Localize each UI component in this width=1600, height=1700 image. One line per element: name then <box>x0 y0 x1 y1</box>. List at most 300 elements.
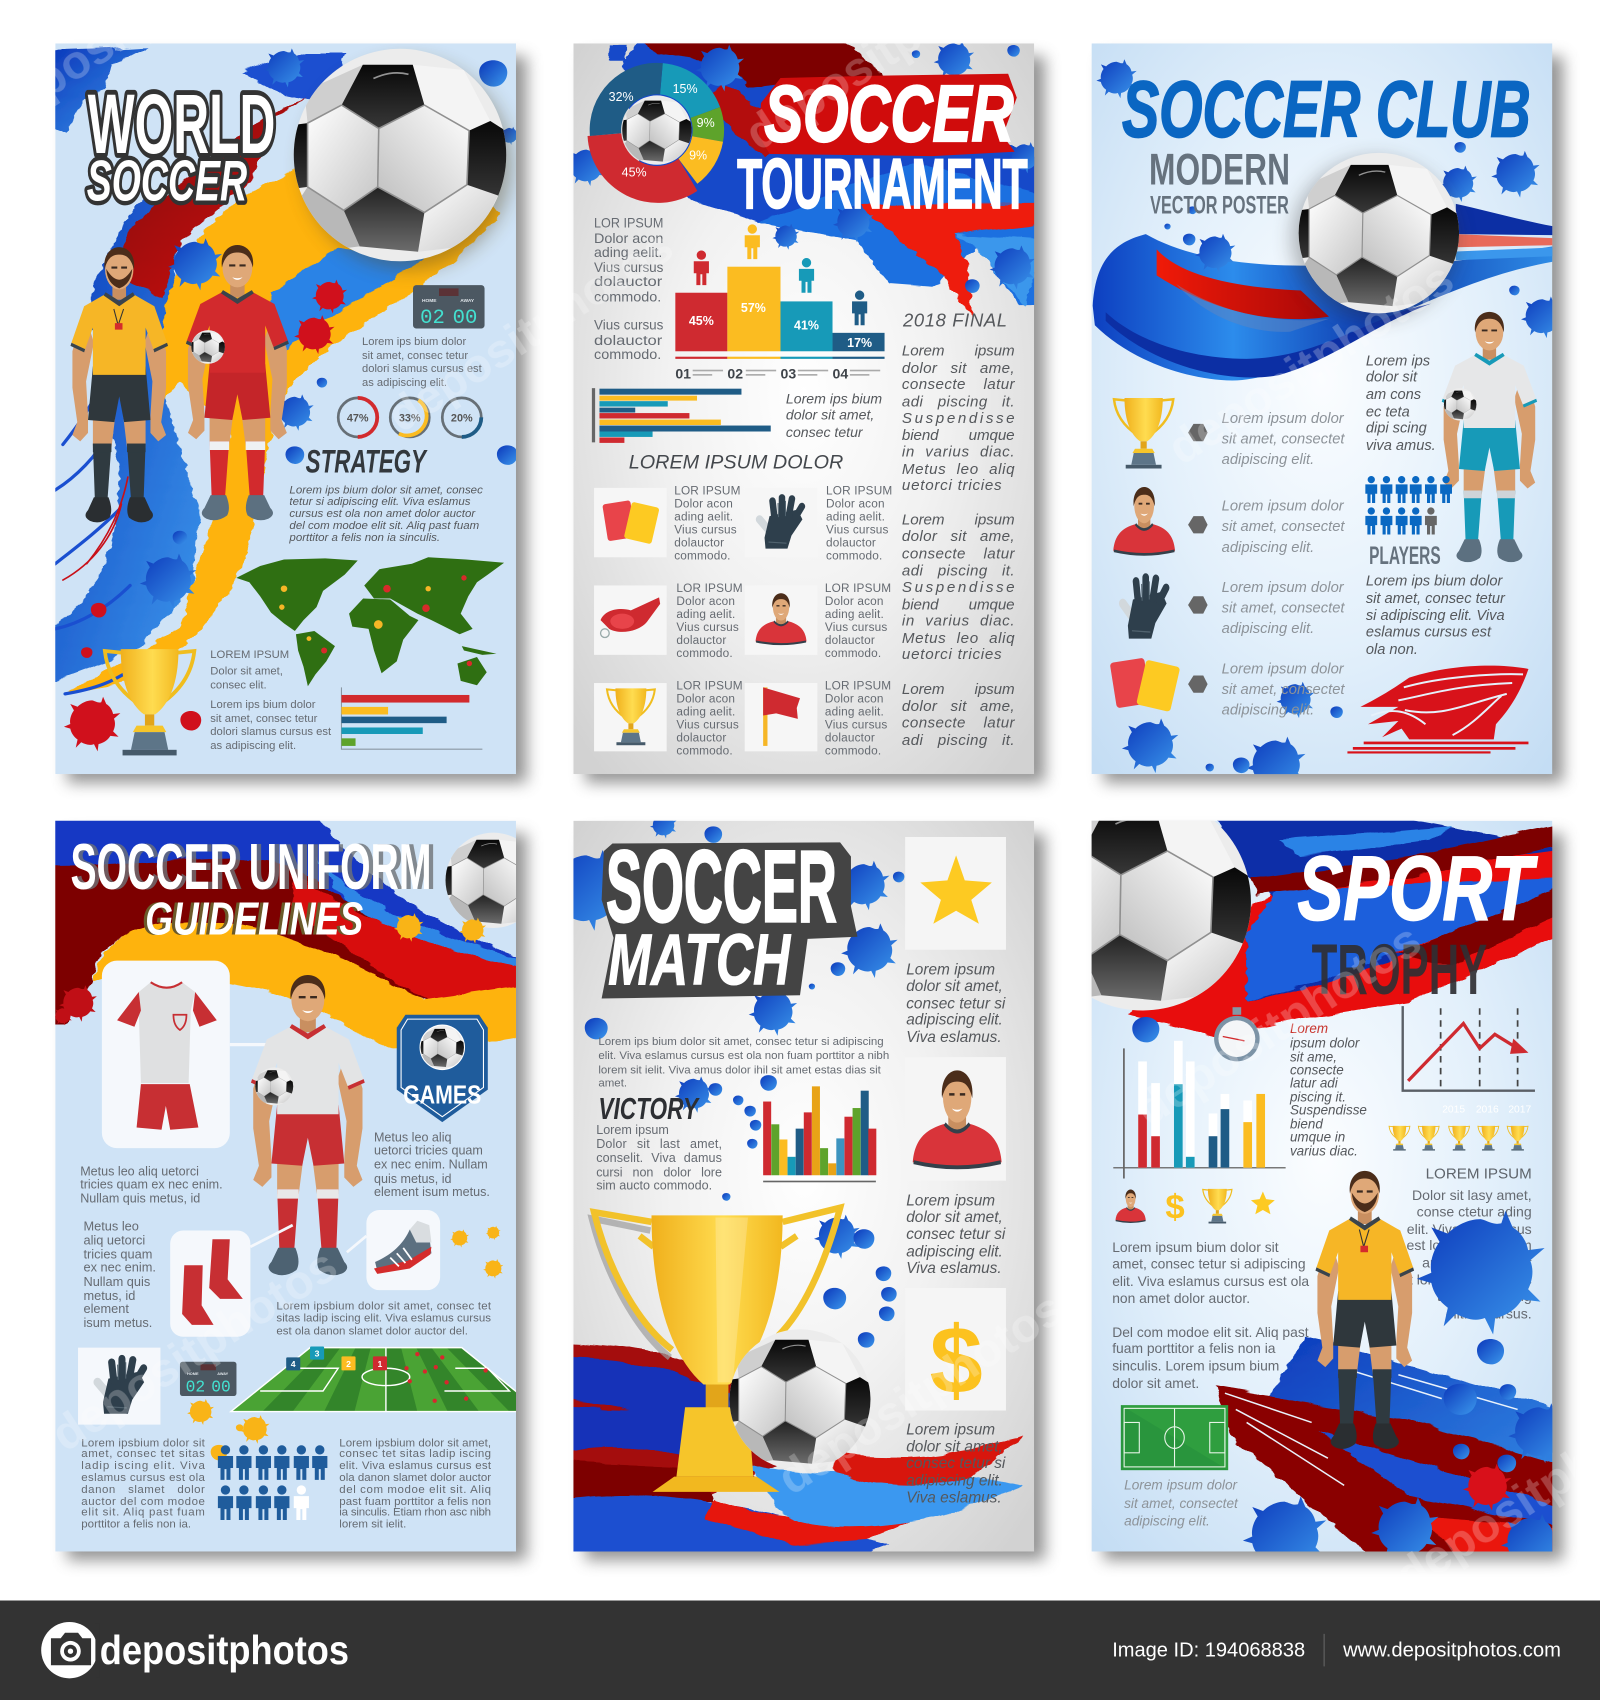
soccer ball <box>1291 153 1462 319</box>
podium chart: 02 <box>727 365 743 381</box>
text block: strategy: del com modoe elit sit. Aliq past fuam <box>289 520 480 532</box>
title <box>70 830 436 945</box>
text blocks: tile captions: commodo. <box>826 548 882 562</box>
text block: right column: Metus leo aliq <box>902 461 1015 478</box>
red player with ball <box>186 245 289 520</box>
text blocks: tile captions: Vius cursus <box>674 522 737 536</box>
podium chart <box>675 224 885 381</box>
icon tiles <box>594 488 817 751</box>
trophy row <box>1389 1126 1528 1151</box>
text blocks: tile captions: Lorem ipsum <box>906 962 995 979</box>
ink blots <box>1096 59 1564 794</box>
text blocks: tile captions: commodo. <box>674 548 731 562</box>
text block: lor ipsum: commodo. <box>594 347 661 362</box>
icon tiles <box>905 837 1006 1411</box>
text blocks: tile captions: consec tetur si <box>906 995 1006 1012</box>
text block: right: element isum metus. <box>374 1185 490 1199</box>
text blocks: tile captions: consec tetur si <box>906 1455 1006 1472</box>
text blocks: tile captions: dolauctor <box>676 731 726 745</box>
text blocks: tile captions: Dolor acon <box>825 594 884 608</box>
text blocks: icon captions: Lorem ipsum dolor <box>1222 580 1345 596</box>
text block: lorem ipsum: Dolor sit amet, <box>210 665 283 677</box>
ink blots <box>566 41 1041 293</box>
footer bar: www.depositphotos.com <box>1342 1639 1561 1662</box>
text blocks: tile captions <box>906 962 1006 1507</box>
text block: intro: amet. <box>598 1077 627 1089</box>
text blocks: tile captions: dolor sit amet, <box>906 1209 1003 1226</box>
text block: victory: conselit. Viva damus <box>596 1151 722 1165</box>
podium chart: 17% <box>847 336 872 350</box>
player with ball <box>251 975 365 1275</box>
text blocks: icon captions: sit amet, consectet <box>1222 431 1345 447</box>
line chart: 2017 <box>1508 1104 1531 1115</box>
text block: bottom right: del com modoe elit sit. Aliq <box>339 1484 491 1496</box>
brush strokes top <box>1127 813 1561 1035</box>
brush strokes bottom <box>1215 1336 1561 1561</box>
horizontal bar chart <box>341 687 482 749</box>
panel: soccer match poster <box>545 812 1034 1561</box>
text block: left: tricies quam ex nec enim. <box>80 1177 223 1191</box>
text blocks: tile captions: Dolor acon <box>676 594 735 608</box>
text block: right column: uetorci tricies <box>902 646 1002 663</box>
text blocks: tile captions: dolauctor <box>674 535 724 549</box>
text block: field caption: Lorem ipsum dolor <box>1124 1478 1238 1493</box>
text block: lor ipsum: dolauctor <box>594 333 663 348</box>
text block: middle: consecte <box>1290 1062 1344 1077</box>
text blocks: tile captions: commodo. <box>676 744 733 758</box>
text block: bottom left <box>81 1437 206 1531</box>
text blocks: tile captions: ading aelit. <box>826 509 885 523</box>
referee <box>70 247 168 522</box>
text block: lor ipsum <box>594 216 664 362</box>
text blocks: tile captions: Vius cursus <box>825 718 887 732</box>
soccer field: 4 <box>291 1359 296 1369</box>
brush strokes <box>43 48 501 694</box>
text blocks: icon captions: adipiscing elit. <box>1222 702 1314 718</box>
red blot <box>1463 1464 1511 1511</box>
title: SOCCER UNIFORM <box>70 830 431 903</box>
text block: strategy: porttitor a felis non ia sinculis. <box>288 532 440 544</box>
text blocks: tile captions: dolauctor <box>825 633 875 647</box>
podium chart: 01 <box>675 365 691 381</box>
text blocks: tile captions <box>674 483 892 758</box>
text blocks: tile captions: Lorem ipsum <box>906 1421 995 1438</box>
subtitle: VECTOR POSTER <box>1150 192 1289 220</box>
pie chart: 15% <box>673 82 698 96</box>
soccer field: 2 <box>346 1359 351 1369</box>
player with ball <box>1442 312 1537 562</box>
text block: middle: Lorem ipsbium dolor sit amet, consec tet <box>276 1301 492 1313</box>
text block: field caption: adipiscing elit. <box>1124 1513 1210 1528</box>
icon: player bust <box>913 1070 1002 1167</box>
footer bar: depositphotos <box>100 1627 349 1673</box>
text blocks: tile captions: ading aelit. <box>825 607 884 621</box>
text blocks: tile captions: dolauctor <box>676 633 726 647</box>
text blocks: tile captions: dolauctor <box>826 535 876 549</box>
heading: lorem ipsum: LOREM IPSUM <box>1426 1166 1532 1183</box>
text block: middle: Suspendisse <box>1290 1103 1367 1118</box>
text block: lorem ipsum: sit amet, consec tetur <box>210 713 318 725</box>
ink blots <box>545 812 904 1348</box>
brush swoosh <box>1093 204 1561 381</box>
badge: games <box>397 1015 488 1122</box>
text block: bottom left: auctor del com modoe <box>81 1496 205 1508</box>
podium chart: 04 <box>833 365 848 381</box>
text block: left: Nullam quis metus, id <box>80 1191 200 1205</box>
text block: player: Lorem ips <box>1366 353 1431 369</box>
text blocks: tile captions: LOR IPSUM <box>825 581 891 595</box>
icon: trophy <box>607 688 655 745</box>
text block: player: viva amus. <box>1366 438 1436 454</box>
socks card <box>170 1225 293 1337</box>
text block: intro: Lorem ips bium dolor sit amet, consec tetur si adipiscing <box>598 1036 884 1048</box>
text block: players: eslamus cursus est <box>1366 624 1492 640</box>
watermarks: depositphotos <box>1159 252 1463 475</box>
soccer ball <box>441 833 543 928</box>
icon: star <box>1251 1192 1275 1214</box>
text blocks: icon captions: sit amet, consectet <box>1222 682 1345 698</box>
text blocks: tile captions: Vius cursus <box>676 620 739 634</box>
heading: victory: VICTORY <box>598 1093 700 1126</box>
text blocks: tile captions: Vius cursus <box>676 718 739 732</box>
text blocks: tile captions: Dolor acon <box>674 496 733 510</box>
text blocks: tile captions: Dolor acon <box>825 692 884 706</box>
text blocks: tile captions: LOR IPSUM <box>825 679 891 693</box>
text block: right column: Suspendisse <box>902 579 1015 596</box>
text block: field caption: sit amet, consectet <box>1124 1496 1239 1511</box>
title badge: MATCH <box>608 919 791 1000</box>
text block: right column: biend umque <box>902 427 1015 444</box>
pie chart: 45% <box>622 166 647 180</box>
text block: lor ipsum: commodo. <box>594 289 661 304</box>
text block: victory: sim aucto commodo. <box>596 1178 712 1192</box>
trophy <box>592 1208 840 1492</box>
text block: right: conse ctetur ading <box>1417 1203 1532 1219</box>
text blocks: icon captions: Lorem ipsum dolor <box>1222 661 1345 677</box>
soccer ball <box>283 49 512 269</box>
text blocks: tile captions: commodo. <box>825 744 881 758</box>
text block: bottom right: elit. Viva eslamus cursus est <box>339 1460 492 1472</box>
text block: right: uetorci tricies quam <box>374 1144 483 1158</box>
text block: right: ex nec enim. Nullam <box>374 1158 488 1172</box>
text block: middle: sitas ladip iscing elit. Viva eslamus cursus <box>276 1313 491 1325</box>
referee <box>1315 1171 1414 1449</box>
title: GUIDELINES <box>142 893 360 945</box>
text blocks: icon captions: adipiscing elit. <box>1222 452 1314 468</box>
text blocks: tile captions: Vius cursus <box>825 620 887 634</box>
icon: cards <box>602 500 660 544</box>
text block: lor ipsum: LOR IPSUM <box>594 216 663 231</box>
text block: left column: ex nec enim. <box>83 1260 156 1275</box>
stadium <box>1347 666 1528 754</box>
soccer field: 1 <box>378 1359 383 1369</box>
icon: player bust <box>1115 1189 1146 1222</box>
yellow splats <box>187 913 503 1460</box>
icon: glove <box>760 498 802 549</box>
text blocks: tile captions: commodo. <box>825 646 881 660</box>
text block: bottom left: eslamus cursus est ola <box>81 1472 205 1484</box>
title badge: SOCCER <box>606 830 837 944</box>
text block: middle: biend <box>1290 1117 1323 1132</box>
text block: caption: consec tetur <box>786 424 864 440</box>
footer logo icon <box>41 1622 100 1678</box>
text block: bottom left: danon slamet dolor <box>81 1484 205 1496</box>
soccer ball <box>722 1329 873 1470</box>
watermarks: depositphotos <box>378 220 683 443</box>
text block: player: am cons <box>1366 387 1422 403</box>
pie chart: 32% <box>609 90 634 104</box>
text block: right column: Metus leo aliq <box>902 630 1015 647</box>
text block: players: Lorem ips bium dolor <box>1366 573 1504 589</box>
text block: middle: est ola danon slamet dolor auctor del. <box>276 1326 468 1338</box>
text blocks: tile captions: dolor sit amet, <box>906 978 1003 995</box>
hexagon bullets <box>1188 424 1208 693</box>
callout line <box>230 1043 297 1046</box>
text blocks: tile captions: adipiscing elit. <box>906 1472 1003 1489</box>
text block: right: quis metus, id <box>374 1172 451 1186</box>
text block: bottom right: past fuam porttitor a felis non <box>339 1496 491 1508</box>
podium chart: 03 <box>780 365 796 381</box>
text blocks: tile captions: adipiscing elit. <box>906 1244 1003 1261</box>
text block: left lower: sinculis. Lorem ipsum bium <box>1112 1357 1279 1373</box>
text block: right column: Lorem ipsum <box>902 343 1015 360</box>
heading: 2018 final: 2018 FINAL <box>902 309 1007 330</box>
text block: right column: in varius diac. <box>902 443 1015 460</box>
text blocks: tile captions: ading aelit. <box>825 705 884 719</box>
text block: player: ec teta <box>1366 404 1410 420</box>
text block: players: sit amet, consec tetur <box>1366 591 1506 607</box>
line chart: 2016 <box>1476 1104 1499 1115</box>
text block: bottom right: consec tet sitas ladip iscing <box>339 1448 491 1460</box>
heading: lorem ipsum dolor: LOREM IPSUM DOLOR <box>629 451 843 473</box>
boot card <box>347 1210 440 1290</box>
title: GUIDELINES <box>145 893 363 945</box>
text block: caption: Lorem ips bium <box>786 390 882 406</box>
text block: middle: Lorem <box>1290 1021 1328 1036</box>
footer bar <box>0 1600 1600 1700</box>
title: TOURNAMENT <box>737 144 1028 223</box>
subtitle <box>1149 145 1290 220</box>
stopwatch <box>1214 1007 1260 1061</box>
text block: left upper: elit. Viva eslamus cursus est ola <box>1112 1273 1309 1289</box>
text block: left upper: amet, consec tetur si adipiscing <box>1112 1255 1306 1271</box>
text block: strategy: tetur si adipiscing elit. Viva eslamus <box>289 496 471 508</box>
text block: bottom right: ola danon slamet dolor auctor <box>339 1472 491 1484</box>
red splats <box>53 985 97 1025</box>
text blocks: icon captions: sit amet, consectet <box>1222 519 1345 535</box>
text block: middle: ipsum dolor <box>1290 1035 1360 1050</box>
text block: right column: in varius diac. <box>902 613 1015 630</box>
text blocks: tile captions: ading aelit. <box>676 705 735 719</box>
text block: bottom left: ladip iscing elit. Viva <box>81 1460 205 1472</box>
text block: middle <box>276 1301 492 1338</box>
text block: left column: Nullam quis <box>83 1274 150 1289</box>
pie chart: 9% <box>697 116 715 130</box>
text block: left column: element <box>83 1301 129 1316</box>
text block: lorem ipsum: Lorem ips bium dolor <box>210 699 316 711</box>
text blocks: tile captions: adipiscing elit. <box>906 1012 1003 1029</box>
text block: right: elit. Vivamus cursus <box>1407 1221 1532 1237</box>
text block: left column: isum metus. <box>83 1315 152 1330</box>
text block: lor ipsum: Vius cursus <box>594 318 664 333</box>
donut gauges: 47% <box>347 413 369 425</box>
text block: right column: adi piscing it. <box>902 732 1015 749</box>
text block: lorem ipsum: LOREM IPSUM <box>210 649 289 661</box>
text block: right column: dolor sit ame, <box>902 698 1015 715</box>
trophy <box>105 649 194 755</box>
player pictograms <box>1365 476 1452 534</box>
text blocks: icon captions: adipiscing elit. <box>1222 621 1314 637</box>
icon: star <box>920 855 992 924</box>
bar chart <box>763 1086 876 1182</box>
text block: middle: piscing it. <box>1289 1090 1346 1105</box>
text block: left column: aliq uetorci <box>83 1233 145 1248</box>
text block: lorem ipsum: consec elit. <box>210 679 267 691</box>
soccer ball <box>1023 794 1255 1010</box>
watermarks: depositphotos <box>1126 913 1431 1137</box>
podium chart: 41% <box>794 319 819 333</box>
text block: middle: umque in <box>1290 1130 1345 1145</box>
text block: right column: dolor sit ame, <box>902 360 1015 377</box>
text block: score: Lorem ips bium dolor <box>362 336 467 348</box>
text block: right column <box>902 343 1016 749</box>
text block: intro: elit. Viva eslamus cursus est ola non fuam porttitor a nibh <box>598 1050 889 1062</box>
text block: right: tetur adipiscing <box>1437 1288 1532 1304</box>
text blocks: tile captions: dolor sit amet, <box>906 1439 1003 1456</box>
text block: lor ipsum: dolauctor <box>594 274 663 289</box>
text block: right column: uetorci tricies <box>902 477 1002 494</box>
white streaks <box>1225 1368 1518 1485</box>
title <box>84 89 276 206</box>
text block: score: as adipiscing elit. <box>362 377 447 389</box>
text blocks: tile captions: LOR IPSUM <box>826 483 892 497</box>
text block: score: sit amet, consec tetur <box>362 350 468 362</box>
text block: victory: Lorem ipsum <box>596 1123 669 1137</box>
text block: middle: varius diac. <box>1290 1144 1358 1159</box>
text block: bottom left: porttitor a felis non ia. <box>81 1519 191 1531</box>
text block: left upper: non amet dolor auctor. <box>1112 1290 1250 1306</box>
soccer field <box>231 1347 541 1412</box>
title: SOCCER <box>87 150 247 214</box>
panel: sport trophy poster <box>1023 794 1570 1577</box>
text blocks: tile captions: Viva eslamus. <box>906 1029 1002 1046</box>
text blocks: icon captions: sit amet, consectet <box>1222 601 1345 617</box>
ink blots <box>1132 1017 1570 1577</box>
icon: player bust <box>756 593 807 644</box>
title: SOCCER UNIFORM <box>75 830 436 903</box>
red blots <box>64 280 347 751</box>
text block: middle: sit ame, <box>1290 1049 1337 1064</box>
panel: soccer tournament poster <box>566 38 1046 774</box>
text block: player: dipi scing <box>1366 421 1427 437</box>
text block: lorem ipsum: as adipiscing elit. <box>210 740 296 752</box>
podium chart: 57% <box>741 301 766 315</box>
text blocks: tile captions: Vius cursus <box>826 522 889 536</box>
donut gauges: 20% <box>451 413 473 425</box>
text block: lor ipsum: ading aelit. <box>594 245 662 260</box>
text block: bottom right: Lorem ipsbium dolor sit amet, <box>339 1437 491 1449</box>
text block: left lower: fuam porttitor a felis non ia <box>1112 1340 1276 1356</box>
text block: intro: lorem sit ielit. Viva amus dolor ihil sit amet estas dias sit <box>598 1064 882 1076</box>
text block: left column: tricies quam <box>83 1247 152 1262</box>
text block: lor ipsum: Vius cursus <box>594 260 664 275</box>
text block: players: si adipiscing elit. Viva <box>1366 608 1505 624</box>
text block: right: auctor dolor amet <box>1422 1254 1532 1270</box>
scoreboard <box>413 285 485 330</box>
text blocks: icon captions <box>1222 411 1345 718</box>
text block: right: est lorem ipsum sim <box>1407 1237 1532 1253</box>
player pictograms <box>218 1445 327 1520</box>
text block: lor ipsum: Dolor acon <box>594 231 663 246</box>
panel: world soccer poster <box>43 43 519 774</box>
text block: right: Sit lorem sit amet nec <box>1396 1272 1532 1288</box>
big ink blot <box>1417 1211 1545 1335</box>
text blocks: tile captions: LOR IPSUM <box>676 581 743 595</box>
text block: right column: dolor sit ame, <box>902 528 1015 545</box>
text blocks: icon captions: adipiscing elit. <box>1222 540 1314 556</box>
text block: left upper: Lorem ipsum bium dolor sit <box>1112 1239 1279 1255</box>
icon: player bust <box>1113 487 1175 554</box>
brush strokes <box>610 38 1046 317</box>
text blocks: tile captions: dolauctor <box>825 731 875 745</box>
text block: right column: Suspendisse <box>902 410 1015 427</box>
text block: right column: Lorem ipsum <box>902 681 1015 698</box>
watermarks: depositphotos <box>42 1239 346 1462</box>
text blocks: tile captions: commodo. <box>676 646 733 660</box>
text blocks: tile captions: LOR IPSUM <box>676 679 743 693</box>
text block: left column: Metus leo <box>83 1219 139 1234</box>
pie chart: 9% <box>689 148 707 162</box>
bar chart <box>1113 1041 1286 1179</box>
watermarks: depositphotos <box>768 1282 1073 1505</box>
text block: bottom right <box>339 1437 492 1531</box>
heading: strategy: STRATEGY <box>306 444 428 480</box>
text blocks: tile captions: Lorem ipsum <box>906 1193 995 1210</box>
text block: left lower: dolor sit amet. <box>1112 1375 1199 1391</box>
subtitle: MODERN <box>1149 145 1290 194</box>
text block: bottom left: Lorem ipsbium dolor sit <box>81 1437 206 1449</box>
text block: strategy: cursus est ola non amet dolor auctor <box>289 508 476 520</box>
podium chart: 45% <box>689 314 714 328</box>
text block: left column: metus, id <box>83 1288 135 1303</box>
text block: strategy: Lorem ips bium dolor sit amet, consec <box>289 484 483 496</box>
icon: trophy <box>1203 1189 1232 1223</box>
icon: flag <box>763 687 800 746</box>
text block: right: Dolor sit lasy amet, <box>1412 1187 1532 1203</box>
icon: dollar: $ <box>1165 1189 1185 1227</box>
text blocks: icon captions: Lorem ipsum dolor <box>1222 411 1345 427</box>
line chart: 2015 <box>1442 1104 1465 1115</box>
text block: right column: consecte latur <box>902 376 1016 393</box>
heading: players: PLAYERS <box>1369 542 1441 570</box>
pie chart <box>588 63 724 203</box>
text block: right: elit.us cursus. <box>1446 1305 1532 1321</box>
text blocks: tile captions: Viva eslamus. <box>906 1490 1002 1507</box>
text block: left lower: Del com modoe elit sit. Aliq past <box>1112 1324 1309 1340</box>
text block: right column: adi piscing it. <box>902 563 1015 580</box>
soccer field: 3 <box>315 1348 320 1358</box>
streaks <box>55 379 130 694</box>
brush strokes <box>564 1342 1024 1561</box>
uniform card <box>102 961 230 1148</box>
text blocks: icon captions: Lorem ipsum dolor <box>1222 499 1345 515</box>
title <box>737 68 1028 223</box>
text block: middle: latur adi <box>1290 1075 1339 1090</box>
scoreboard <box>180 1362 236 1397</box>
icon: dollar: $ <box>930 1308 983 1414</box>
text block: bottom right: lorem sit ielit. <box>339 1519 406 1531</box>
text block: lorem ipsum: dolori slamus cursus est <box>210 726 332 738</box>
